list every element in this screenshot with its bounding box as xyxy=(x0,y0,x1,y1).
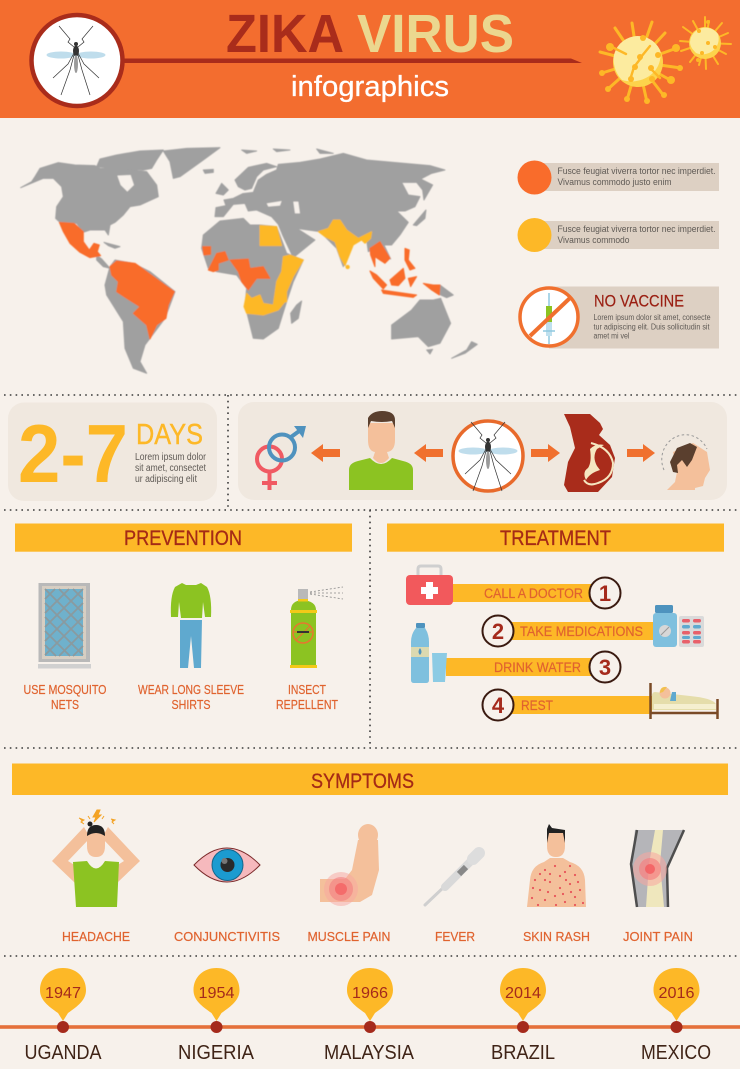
step 4: rest xyxy=(482,683,718,720)
step 1: call a doctor xyxy=(406,566,620,608)
heading xyxy=(387,524,724,552)
arrow xyxy=(531,444,560,462)
labels: INSECT xyxy=(288,683,326,697)
callout: no vaccine: amet mi vel xyxy=(594,332,630,340)
milestone 2016 xyxy=(641,968,711,1064)
panel: incubation days: sit amet, consectet xyxy=(135,463,206,474)
labels: CONJUNCTIVITIS xyxy=(174,930,280,944)
labels xyxy=(62,930,693,944)
legend: yellow regions: Fusce feugiat viverra tortor nec imperdiet. xyxy=(558,224,716,235)
panel: incubation days: 2-7 xyxy=(18,407,128,500)
callout: no vaccine: Lorem ipsum dolor sit amet, consecte xyxy=(594,313,711,322)
panel: incubation days: Lorem ipsum dolor xyxy=(135,452,207,463)
milestone 2014: BRAZIL xyxy=(491,1042,555,1064)
icon: thermometer xyxy=(425,853,479,905)
heading xyxy=(12,764,728,795)
milestone 2014: 2014 xyxy=(505,985,541,1002)
heading: PREVENTION xyxy=(124,527,242,550)
milestone 1966: MALAYSIA xyxy=(324,1042,415,1064)
heading: SYMPTOMS xyxy=(311,770,414,793)
icon: large virus xyxy=(599,22,683,104)
step 1: call a doctor: CALL A DOCTOR xyxy=(484,586,583,601)
icon: mosquito badge xyxy=(453,421,523,491)
legend: yellow regions xyxy=(518,218,719,252)
title: ZIKA VIRUS xyxy=(226,4,514,64)
labels: MUSCLE PAIN xyxy=(308,930,390,944)
step 3: drink water: 3 xyxy=(599,655,611,680)
milestone 2014 xyxy=(491,968,555,1064)
step 3: drink water xyxy=(411,623,620,683)
step 4: rest: REST xyxy=(521,698,553,713)
icon: microcephaly baby head xyxy=(662,435,710,490)
step 2: take medications: 2 xyxy=(492,619,504,644)
icon: small virus xyxy=(680,17,731,69)
legend: orange regions: Vivamus commodo justo enim xyxy=(558,177,672,188)
icon: mosquito badge xyxy=(32,15,122,106)
legend: orange regions: Fusce feugiat viverra tortor nec imperdiet. xyxy=(558,166,716,177)
step 4: rest: 4 xyxy=(492,693,505,718)
milestone 2016: MEXICO xyxy=(641,1042,711,1064)
icon: window net xyxy=(38,583,91,668)
heading: TREATMENT xyxy=(500,527,611,550)
grey landmasses xyxy=(21,148,477,373)
icon: pregnant body with fetus xyxy=(564,414,615,492)
labels: USE MOSQUITO xyxy=(24,683,107,697)
labels: SHIRTS xyxy=(172,698,210,712)
milestone 1947 xyxy=(24,968,102,1064)
callout: no vaccine: NO VACCINE xyxy=(594,292,684,310)
orange regions xyxy=(59,222,440,339)
labels: SKIN RASH xyxy=(523,930,590,944)
step 1: call a doctor: 1 xyxy=(599,581,611,606)
callout: no vaccine xyxy=(520,286,719,348)
icon: long sleeves and pants xyxy=(171,583,211,668)
milestone 1966: 1966 xyxy=(352,985,388,1002)
yellow regions xyxy=(244,220,372,315)
icon: muscle pain arm xyxy=(320,824,379,906)
panel: incubation days xyxy=(8,402,217,501)
title: ZIKA VIRUS: VIRUS xyxy=(357,4,514,64)
icon: gender symbols xyxy=(257,426,306,490)
subtitle: infographics xyxy=(291,71,449,103)
icon: red eye xyxy=(194,848,260,882)
arrow xyxy=(414,444,443,462)
icon: man xyxy=(349,411,413,490)
heading xyxy=(15,524,352,552)
milestone 1954: NIGERIA xyxy=(178,1042,255,1064)
arrow xyxy=(627,444,655,462)
panel: symptoms xyxy=(12,764,728,944)
icon: crossed syringe xyxy=(520,288,578,346)
title rule xyxy=(122,58,582,63)
legend: orange regions xyxy=(518,160,719,194)
inland seas xyxy=(117,175,300,213)
icon: insect repellent xyxy=(290,587,343,668)
labels xyxy=(24,683,338,712)
callout: no vaccine: tur adipiscing elit. Duis sollicitudin sit xyxy=(594,322,710,332)
panel: transmission xyxy=(238,402,727,500)
step 3: drink water: DRINK WATER xyxy=(494,660,581,675)
labels: WEAR LONG SLEEVE xyxy=(138,683,244,697)
labels: NETS xyxy=(51,698,79,712)
labels: HEADACHE xyxy=(62,930,130,944)
milestone 1947: UGANDA xyxy=(24,1042,102,1064)
labels: FEVER xyxy=(435,930,475,944)
milestone 2016: 2016 xyxy=(658,985,695,1002)
icon: headache xyxy=(52,810,140,907)
world map xyxy=(21,148,477,373)
milestone 1954 xyxy=(178,968,255,1064)
header banner xyxy=(0,0,740,118)
milestone 1954: 1954 xyxy=(198,985,235,1002)
panel: incubation days: DAYS xyxy=(136,419,203,451)
legend: yellow regions: Vivamus commodo xyxy=(558,235,630,246)
panel: treatment xyxy=(387,524,724,720)
milestone 1966 xyxy=(324,968,415,1064)
arrow xyxy=(311,444,340,462)
timeline xyxy=(0,968,740,1064)
milestone 1947: 1947 xyxy=(45,985,81,1002)
title: ZIKA VIRUS: ZIKA xyxy=(226,4,344,64)
step 2: take medications xyxy=(482,605,704,647)
step 2: take medications: TAKE MEDICATIONS xyxy=(520,624,643,639)
labels: REPELLENT xyxy=(276,698,338,712)
icon: knee joint pain xyxy=(631,830,684,907)
panel: prevention xyxy=(15,524,352,712)
panel: incubation days: ur adipiscing elit xyxy=(135,474,197,485)
icon: skin rash xyxy=(527,824,586,907)
labels: JOINT PAIN xyxy=(623,930,693,944)
